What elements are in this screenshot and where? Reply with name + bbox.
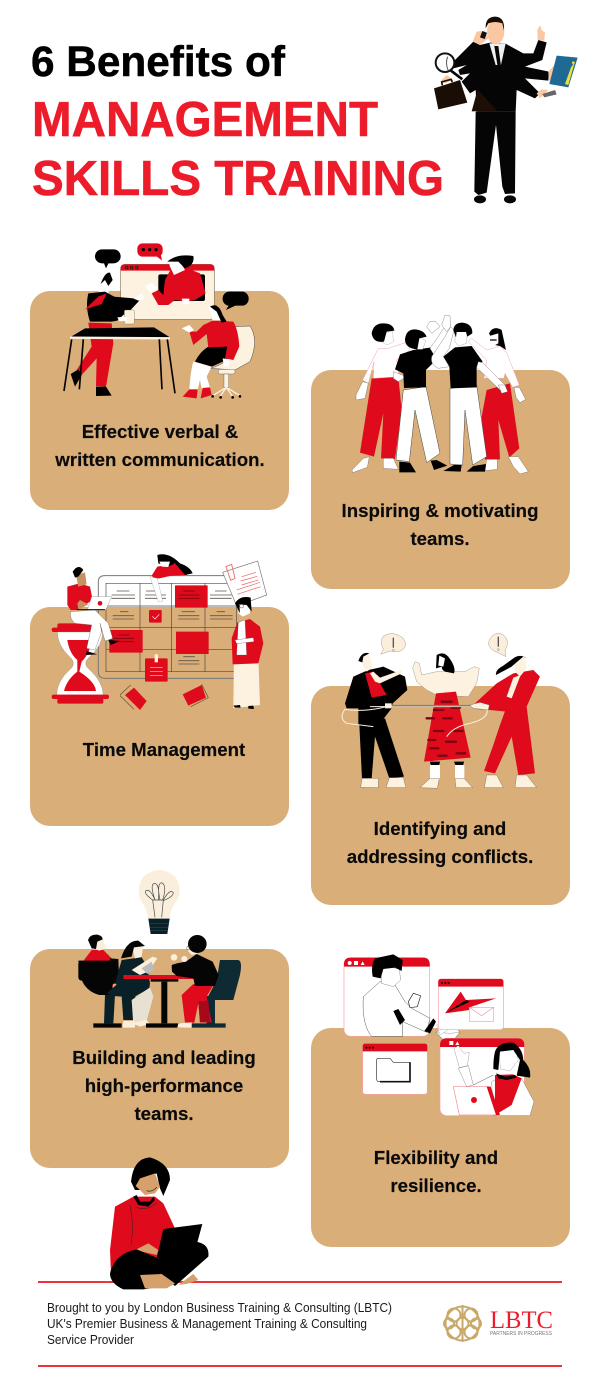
caption: teams.	[134, 1103, 194, 1124]
illustration: team high five	[352, 315, 528, 474]
logo: LBTC: PARTNERS IN PROGRESS	[490, 1331, 553, 1337]
caption	[54, 421, 265, 470]
illustration: windows, people and messages	[344, 954, 534, 1116]
title	[31, 38, 444, 206]
footer text	[47, 1301, 392, 1347]
caption: Inspiring & motivating	[342, 500, 538, 521]
panel: flexibility	[311, 954, 570, 1247]
icon: gold brain roundel	[444, 1305, 481, 1342]
title: SKILLS TRAINING	[32, 151, 444, 206]
caption: Time Management	[83, 739, 245, 760]
caption: addressing conflicts.	[347, 846, 533, 867]
card background	[311, 686, 570, 905]
divider: top footer rule	[38, 1281, 562, 1283]
card background	[311, 370, 570, 589]
caption: Effective verbal &	[82, 421, 238, 442]
caption: Building and leading	[72, 1047, 256, 1068]
logo: LBTC	[444, 1305, 553, 1342]
illustration: office conversation	[64, 243, 255, 399]
footer text: Brought to you by London Business Training & Consulting (LBTC)	[47, 1301, 392, 1315]
card background	[311, 1028, 570, 1247]
caption	[72, 1047, 256, 1124]
logo: LBTC: LBTC	[490, 1307, 553, 1334]
footer text: Service Provider	[47, 1333, 134, 1347]
caption: Identifying and	[374, 818, 506, 839]
caption: teams.	[410, 528, 470, 549]
panel: communication	[30, 243, 289, 510]
divider: bottom footer rule	[38, 1365, 562, 1367]
caption	[374, 1147, 498, 1196]
icon: multitasking businessman	[434, 17, 578, 203]
illustration: woman with laptop	[110, 1157, 208, 1289]
card background	[30, 607, 289, 826]
card background	[30, 291, 289, 510]
panel: conflicts	[311, 633, 570, 905]
caption: written communication.	[54, 449, 265, 470]
caption	[342, 500, 538, 549]
title: 6 Benefits of	[31, 38, 286, 86]
illustration: calendar board and hourglass	[52, 554, 267, 710]
panel: time management	[30, 554, 289, 826]
title: MANAGEMENT	[32, 92, 378, 147]
caption	[347, 818, 533, 867]
caption: Flexibility and	[374, 1147, 498, 1168]
caption: high-performance	[85, 1075, 243, 1096]
footer text: UK's Premier Business & Management Training & Consulting	[47, 1317, 367, 1331]
illustration: tug of war	[342, 633, 540, 788]
illustration: team at a table under a light bulb	[78, 870, 241, 1028]
panel: high-performance teams	[30, 870, 289, 1168]
card background	[30, 949, 289, 1168]
panel: inspiring teams	[311, 315, 570, 589]
caption: resilience.	[390, 1175, 482, 1196]
